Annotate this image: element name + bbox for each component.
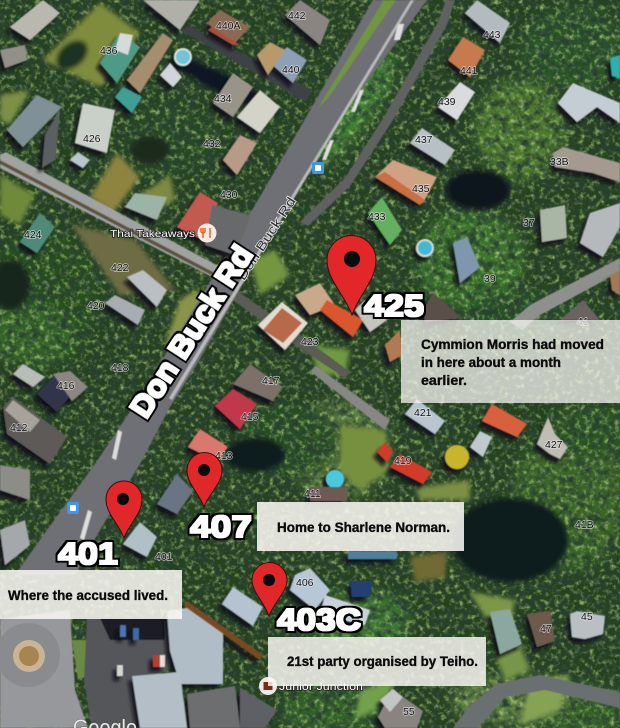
icon: bus stop lower xyxy=(67,502,79,514)
street number labels: 426 xyxy=(83,133,101,145)
street number labels: 412 xyxy=(10,422,28,434)
street number labels: 406 xyxy=(296,577,314,589)
street number labels: 39 xyxy=(484,273,496,285)
street number labels: 440A xyxy=(216,20,241,32)
small map road label: Don Buck Rd xyxy=(234,194,299,283)
street number labels: 435 xyxy=(412,183,430,195)
icon: bus stop upper xyxy=(312,162,324,174)
place label: Thai Takeaways: Thai Takeaways xyxy=(110,228,195,240)
number label: 407: 407 xyxy=(190,509,252,544)
street number labels: 437 xyxy=(415,134,433,146)
callout: 425: earlier. xyxy=(421,373,467,388)
street number labels: 41B xyxy=(575,519,594,531)
street number labels: 421 xyxy=(414,407,432,419)
street number labels: 430 xyxy=(220,189,238,201)
street number labels: 55 xyxy=(403,706,415,718)
callout: 425: Cymmion Morris had moved xyxy=(421,337,604,352)
street number labels: 432 xyxy=(203,138,221,150)
callout: 407 xyxy=(257,502,464,551)
street number labels: 436 xyxy=(100,45,118,57)
callout: 407: Home to Sharlene Norman. xyxy=(277,520,450,535)
street number labels: 433 xyxy=(368,211,386,223)
street number labels: 411 xyxy=(304,488,321,500)
callout: 425 xyxy=(401,320,620,403)
callout: 403C xyxy=(268,637,486,686)
pin: 425 xyxy=(327,236,376,315)
place label: Junior Junction xyxy=(259,677,363,695)
street number labels: 427 xyxy=(545,439,563,451)
place label: Junior Junction: Junior Junction xyxy=(279,681,363,693)
callout: 403C: 21st party organised by Teiho. xyxy=(287,654,478,669)
street number labels: 442 xyxy=(288,10,306,22)
number label: 401: 401 xyxy=(58,536,118,571)
street number labels: 416 xyxy=(57,380,75,392)
place label: Thai Takeaways xyxy=(110,224,216,242)
street number labels: 41 xyxy=(577,316,589,328)
street number labels: 45 xyxy=(581,611,593,623)
street number labels: 33B xyxy=(550,156,569,168)
street number labels: 439 xyxy=(438,96,456,108)
street number labels: 37 xyxy=(523,217,535,229)
pin: 403C xyxy=(252,562,287,616)
street number labels: 443 xyxy=(483,29,501,41)
street number labels: 418 xyxy=(111,362,129,374)
street number labels: 413 xyxy=(215,450,233,462)
street number labels: 422 xyxy=(111,262,129,274)
street number labels: 47 xyxy=(540,623,552,635)
street number labels: 440 xyxy=(282,64,300,76)
roundabout xyxy=(0,623,60,687)
street number labels: 420 xyxy=(87,300,105,312)
callout: 401 xyxy=(0,570,182,619)
number label: 403C: 403C xyxy=(277,602,361,637)
pin: 407 xyxy=(187,452,222,507)
street number labels: 441 xyxy=(460,65,478,77)
street number labels: 417 xyxy=(262,375,280,387)
callout: 401: Where the accused lived. xyxy=(8,588,168,603)
street number labels: 434 xyxy=(214,93,232,105)
road label: Don Buck Rd: Don Buck Rd xyxy=(123,239,260,424)
street number labels: 424 xyxy=(24,229,42,241)
callout: 425: in here about a month xyxy=(421,355,561,370)
number label: 425: 425 xyxy=(364,288,424,323)
street number labels: 415 xyxy=(241,411,259,423)
street number labels: 401 xyxy=(155,551,173,563)
street number labels: 419 xyxy=(394,455,412,467)
street number labels: 423 xyxy=(301,336,319,348)
pin: 401 xyxy=(106,481,142,538)
